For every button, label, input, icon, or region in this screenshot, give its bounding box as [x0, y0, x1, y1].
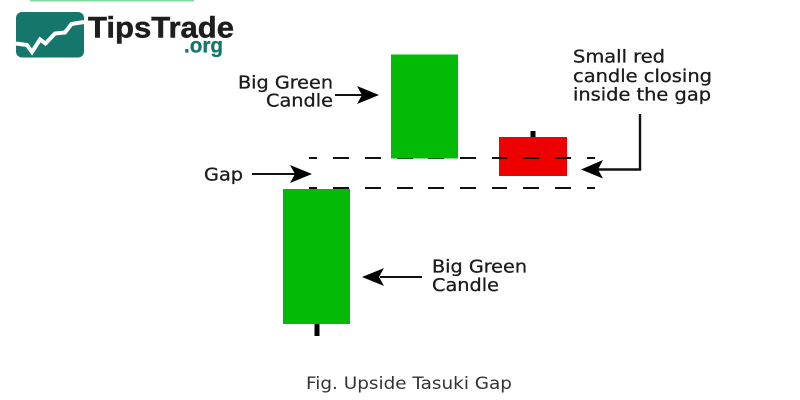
label: lower big green candle [432, 256, 527, 296]
label: small red candle: Small red [573, 46, 665, 68]
label: small red candle: candle closing [573, 66, 712, 87]
icon: logo chart [16, 12, 84, 58]
logo suffix: .org [184, 34, 223, 58]
top green bar [30, 0, 194, 2]
candle: small red with wick [492, 131, 571, 176]
logo wordmark: TipsTrade [88, 12, 234, 44]
label: small red candle: inside the gap [573, 84, 711, 106]
label: lower big green candle: Candle [432, 275, 499, 296]
caption: Fig. Upside Tasuki Gap [306, 374, 512, 394]
candle: lower big green with wick [283, 189, 350, 336]
logo [16, 12, 234, 58]
candle: upper big green [391, 54, 458, 158]
arrow: to upper candle [335, 86, 379, 104]
arrow: to lower candle [362, 268, 422, 286]
label: upper big green candle [238, 72, 333, 112]
label: small red candle [573, 46, 712, 106]
arrow: to red candle [581, 114, 640, 178]
dashed gap lines [309, 158, 595, 188]
label: upper big green candle: Candle [266, 90, 333, 112]
label: upper big green candle: Big Green [238, 72, 333, 94]
arrow: to gap [252, 165, 312, 183]
label: gap: Gap [204, 164, 243, 186]
label: lower big green candle: Big Green [432, 256, 527, 278]
